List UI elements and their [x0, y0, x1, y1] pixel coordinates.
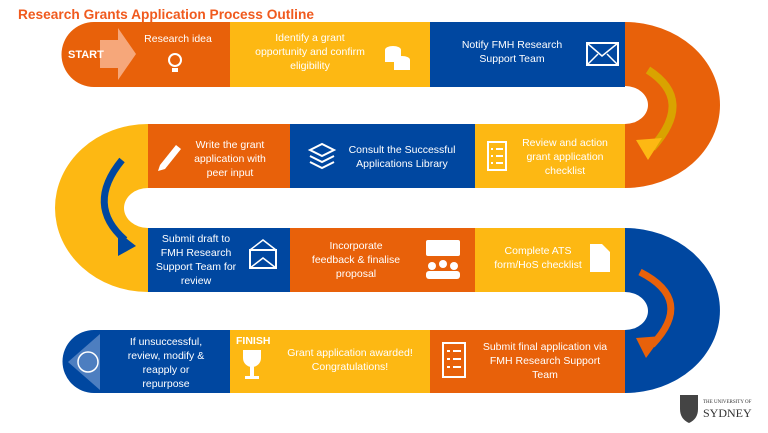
step: submit final: FMH Research Support	[490, 355, 600, 367]
step: submit draft: Support Team for	[156, 261, 237, 273]
step: consult library: Applications Library	[356, 158, 449, 170]
step: finish awarded: FINISH	[236, 335, 270, 347]
step: submit draft: FMH Research	[161, 247, 231, 259]
step: start research idea: Research idea	[144, 33, 212, 45]
step: identify grant: eligibility	[290, 60, 331, 72]
logo: university of sydney	[680, 395, 752, 423]
row 1	[62, 22, 625, 87]
title: Research Grants Application Process Outline	[18, 6, 314, 22]
step: review checklist: checklist	[545, 165, 585, 177]
step: identify grant	[230, 22, 430, 87]
step: if unsuccessful: repurpose	[142, 378, 190, 390]
step: submit final: Team	[532, 369, 558, 381]
step: complete ATS: form/HoS checklist	[494, 259, 582, 271]
step: review checklist	[475, 124, 625, 188]
step: write application: peer input	[207, 167, 253, 179]
logo: university of sydney: THE UNIVERSITY OF	[703, 400, 752, 405]
step: if unsuccessful: review, modify &	[128, 350, 204, 362]
row 4	[62, 330, 625, 393]
row 3	[148, 228, 625, 292]
row 2	[148, 124, 625, 188]
step: consult library: Consult the Successful	[349, 144, 455, 156]
step: start research idea: START	[68, 49, 104, 61]
step: submit draft: Submit draft to	[162, 233, 230, 245]
step: complete ATS	[475, 228, 625, 292]
step: identify grant: Identify a grant	[275, 32, 345, 44]
curve: left yellow turn	[55, 124, 148, 292]
step: write application	[148, 124, 290, 188]
step: start research idea	[62, 22, 230, 87]
step: submit final: Submit final application via	[483, 341, 607, 353]
step: incorporate feedback	[290, 228, 475, 292]
step: submit draft	[148, 228, 290, 292]
step: review checklist: Review and action	[522, 137, 608, 149]
step: write application: Write the grant	[196, 139, 264, 151]
step: write application: application with	[194, 153, 266, 165]
step: complete ATS: Complete ATS	[505, 245, 571, 257]
step: if unsuccessful: reapply or	[143, 364, 190, 376]
step: incorporate feedback: feedback & finalise	[312, 254, 400, 266]
step: finish awarded: Congratulations!	[312, 361, 388, 373]
step: if unsuccessful	[62, 330, 230, 393]
step: notify FMH	[430, 22, 625, 87]
step: finish awarded	[230, 330, 430, 393]
step: identify grant: opportunity and confirm	[255, 46, 365, 58]
curve: right blue turn	[625, 228, 720, 393]
logo: university of sydney: SYDNEY	[703, 406, 752, 420]
step: submit final	[430, 330, 625, 393]
step: incorporate feedback: proposal	[336, 268, 376, 280]
curve: right orange turn	[625, 22, 720, 188]
step: submit draft: review	[181, 275, 212, 287]
step: consult library	[290, 124, 475, 188]
step: incorporate feedback: Incorporate	[329, 240, 383, 252]
step: finish awarded: Grant application awarded!	[287, 347, 413, 359]
step: notify FMH: Notify FMH Research	[462, 39, 562, 51]
step: notify FMH: Support Team	[479, 53, 545, 65]
step: review checklist: grant application	[526, 151, 604, 163]
step: if unsuccessful: If unsuccessful,	[130, 336, 202, 348]
